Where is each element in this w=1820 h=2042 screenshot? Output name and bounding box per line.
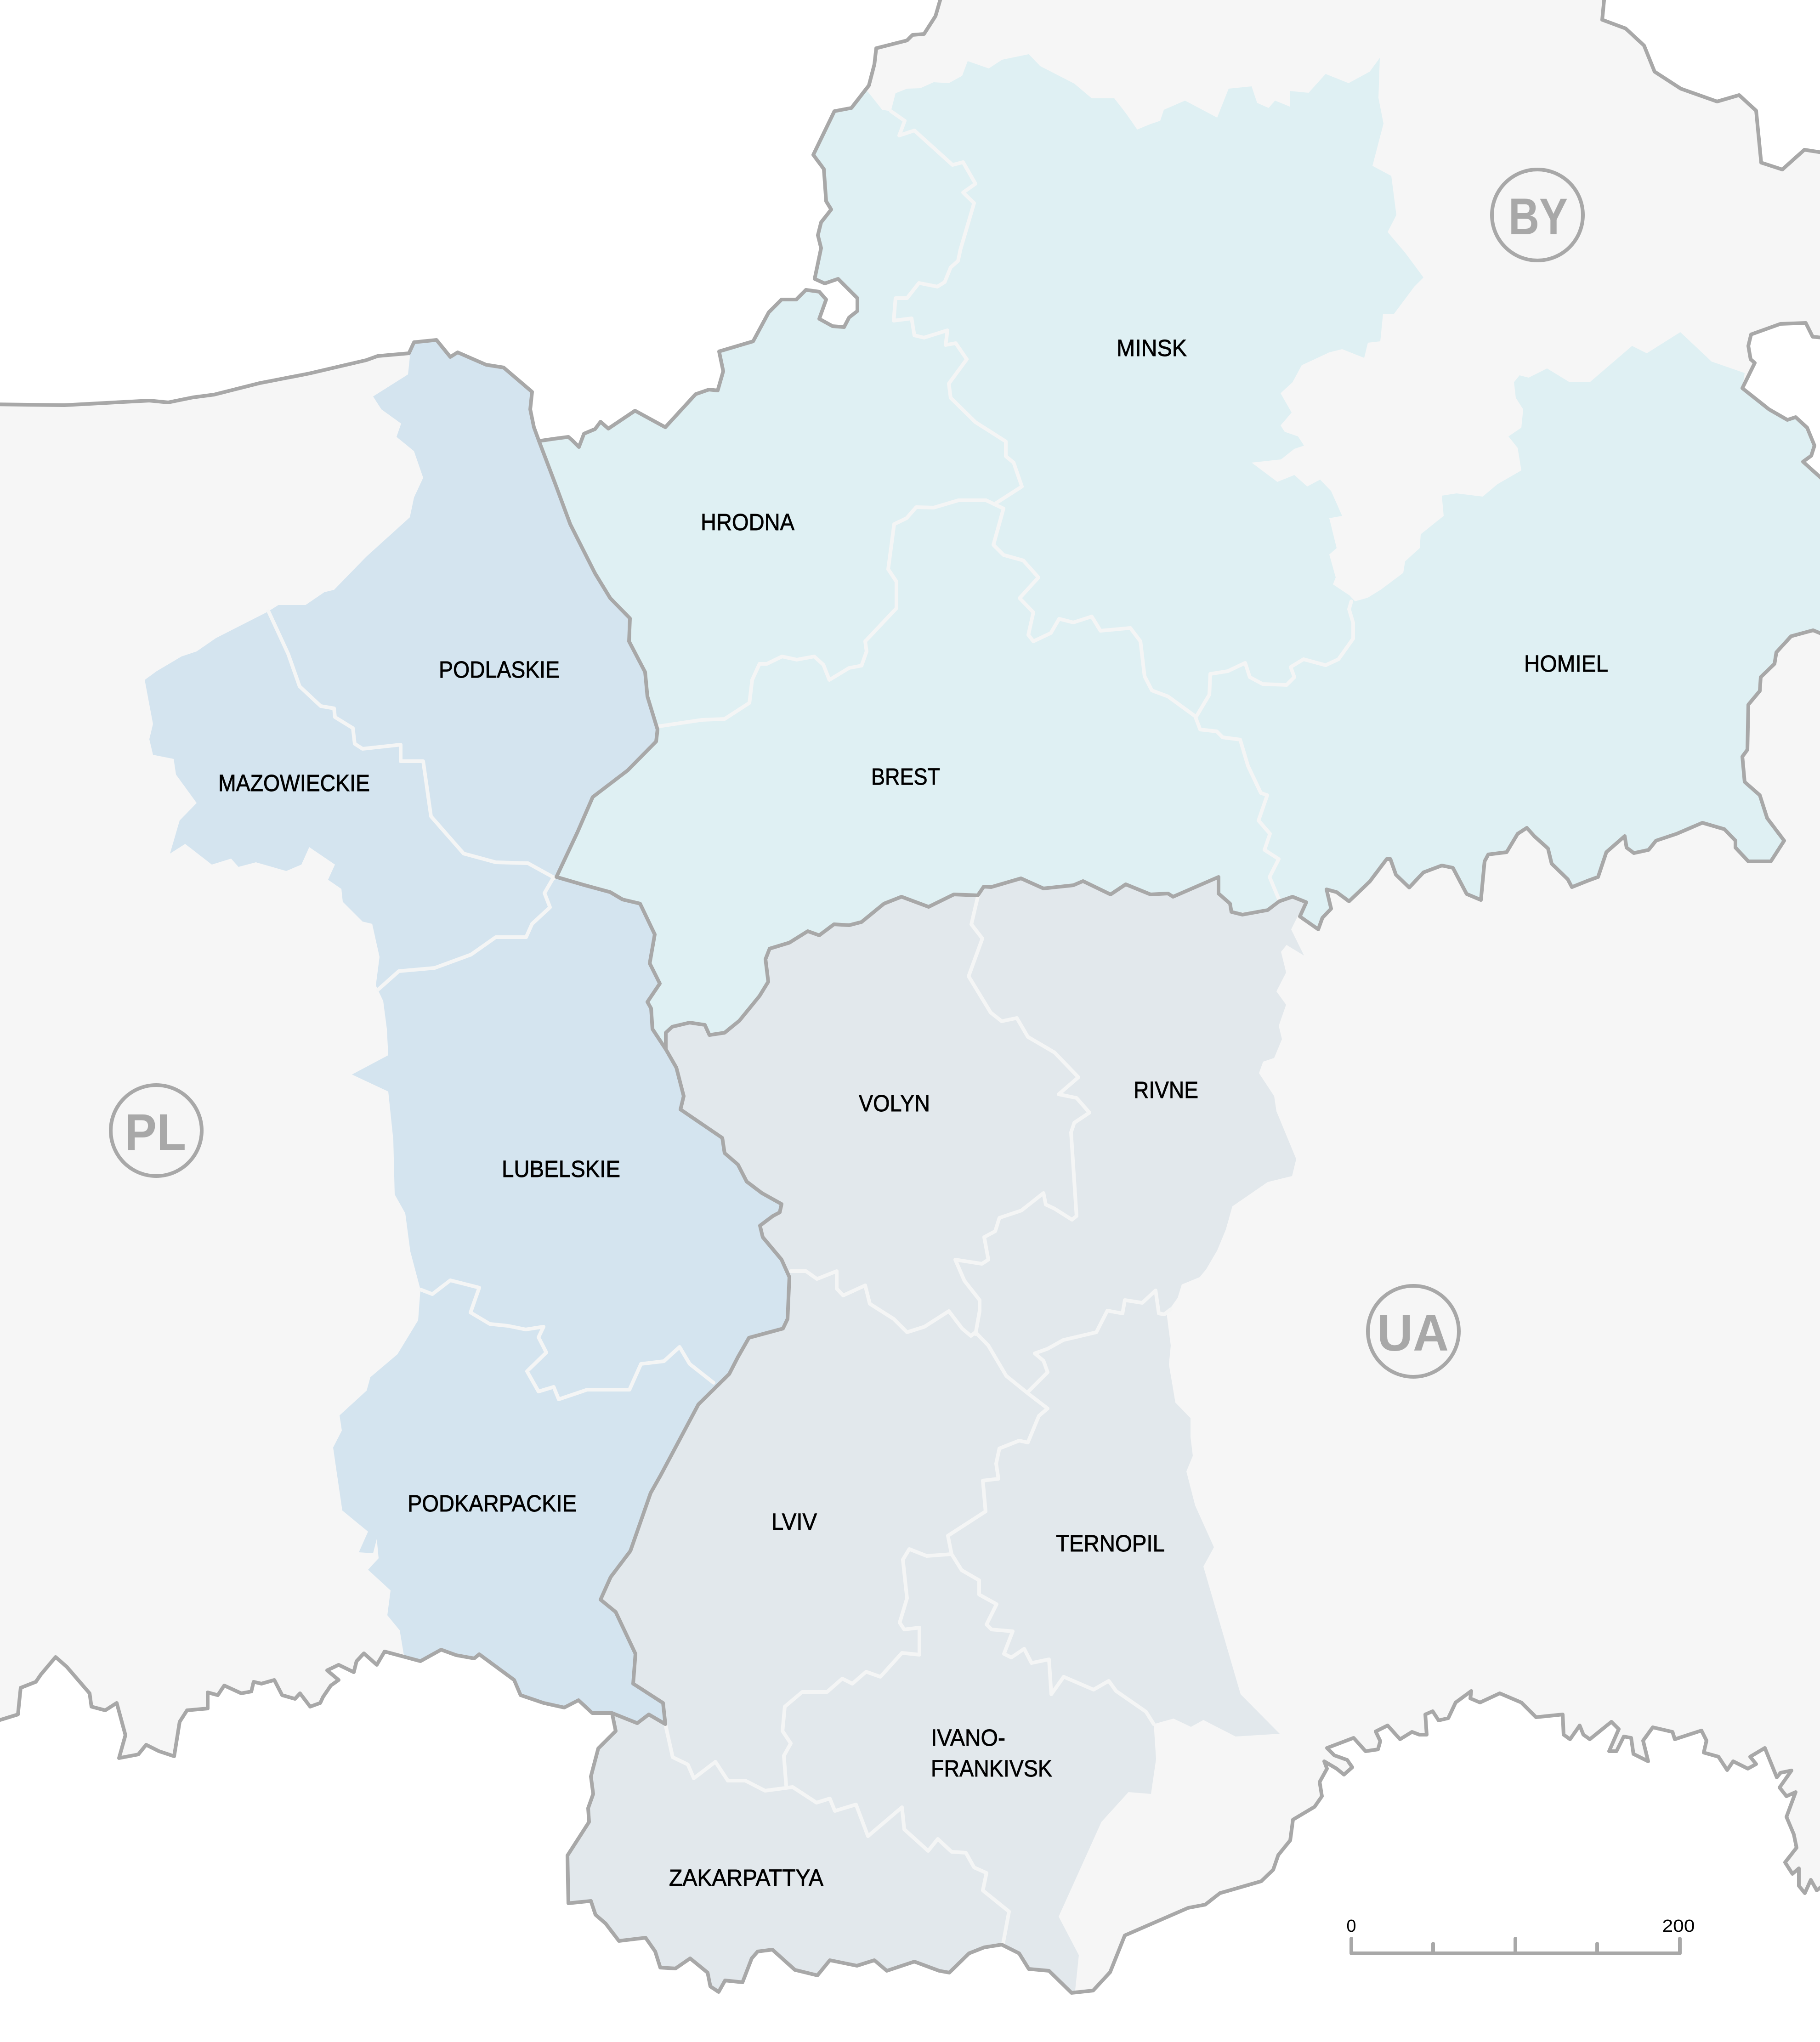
internal borders: Belarus oblasts: [659, 111, 1353, 900]
scale bar: 200: [1662, 1917, 1695, 1936]
region labels: HOMIEL: [1524, 650, 1608, 677]
region labels: PODKARPACKIE: [408, 1490, 577, 1516]
country badge: UA: [1368, 1286, 1459, 1377]
internal borders: Ukrainian oblasts: [665, 897, 1171, 1944]
region labels: VOLYN: [859, 1090, 930, 1116]
national border: Poland east: [539, 441, 789, 1724]
scale bar: [1346, 1917, 1695, 1953]
region labels: RIVNE: [1134, 1077, 1198, 1103]
region group: Belarus: [505, 46, 1820, 1080]
region labels: LUBELSKIE: [502, 1156, 620, 1182]
region labels: HRODNA: [701, 509, 794, 535]
region labels: LVIV: [771, 1509, 817, 1535]
region labels: BREST: [871, 764, 940, 790]
outside area: eastern pocket: [1742, 323, 1820, 487]
country badge: PL: [111, 1085, 202, 1176]
country badge: UA: UA: [1377, 1304, 1449, 1362]
country badge: PL: PL: [125, 1103, 186, 1161]
region labels: FRANKIVSK: [931, 1755, 1052, 1782]
region labels: [218, 335, 1608, 1891]
outside area: north-east: [1602, 0, 1820, 170]
region group: Ukraine: [551, 877, 1306, 2021]
national border: Belarus and Ukraine: [666, 630, 1820, 1049]
region labels: MAZOWIECKIE: [218, 770, 370, 796]
outside area: north-west: [0, 0, 943, 447]
internal borders: Polish voivodeships: [268, 611, 714, 1399]
region labels: PODLASKIE: [439, 656, 560, 683]
region labels: TERNOPIL: [1056, 1530, 1165, 1556]
region labels: IVANO-: [931, 1725, 1005, 1751]
region group: Poland: [145, 322, 789, 1746]
country badge: BY: [1492, 170, 1583, 260]
region labels: ZAKARPATTYA: [669, 1865, 823, 1891]
country badge: BY: BY: [1508, 188, 1568, 245]
region labels: MINSK: [1117, 335, 1187, 361]
outside area: south: [0, 1650, 1820, 2042]
scale bar: 0: [1346, 1917, 1356, 1936]
